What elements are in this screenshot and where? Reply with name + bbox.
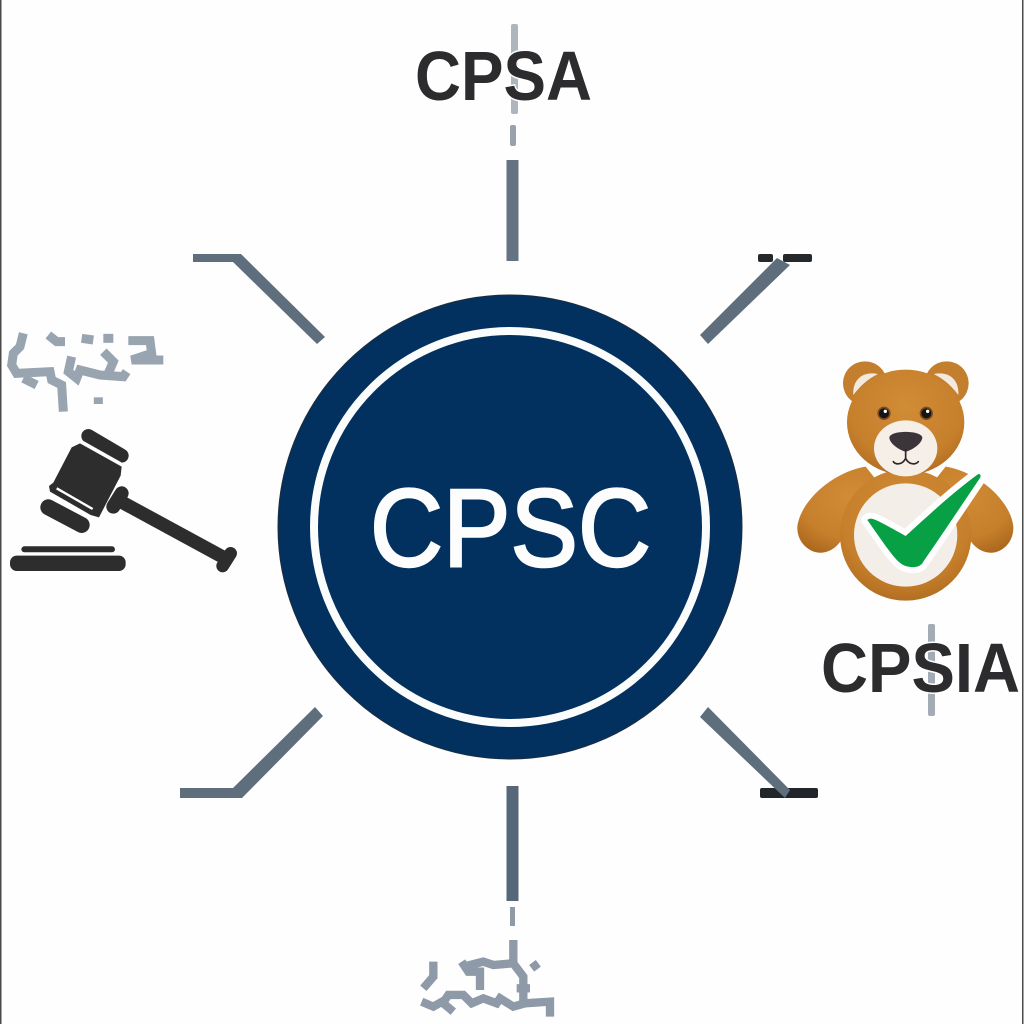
icon: teddy bear with check mark [797,361,1013,601]
garbled label: bottom [422,940,550,1017]
garbled label: left [12,333,163,412]
bear ears [843,361,969,405]
connector: bottom line and dash [506,786,518,926]
central circle: CPSC [278,295,742,759]
label: CPSA: CPSA [415,37,592,115]
bear head [847,370,964,475]
icon: gavel [10,436,231,571]
connector: top-right elbow [700,254,812,344]
connector: bottom-left elbow [180,707,323,798]
bear muzzle [874,420,937,476]
connector: top dashes and line [506,24,518,261]
bear belly [854,483,957,587]
check mark [867,474,981,567]
connector: top-left elbow [193,254,325,344]
bear eyes [877,407,933,420]
bear nose and mouth [889,432,922,464]
heading: CPSC: CPSC [370,467,651,590]
bear arms and body [797,467,1013,601]
connector: CPSIA dash [928,624,935,716]
connector: bottom-right elbow [700,707,818,798]
